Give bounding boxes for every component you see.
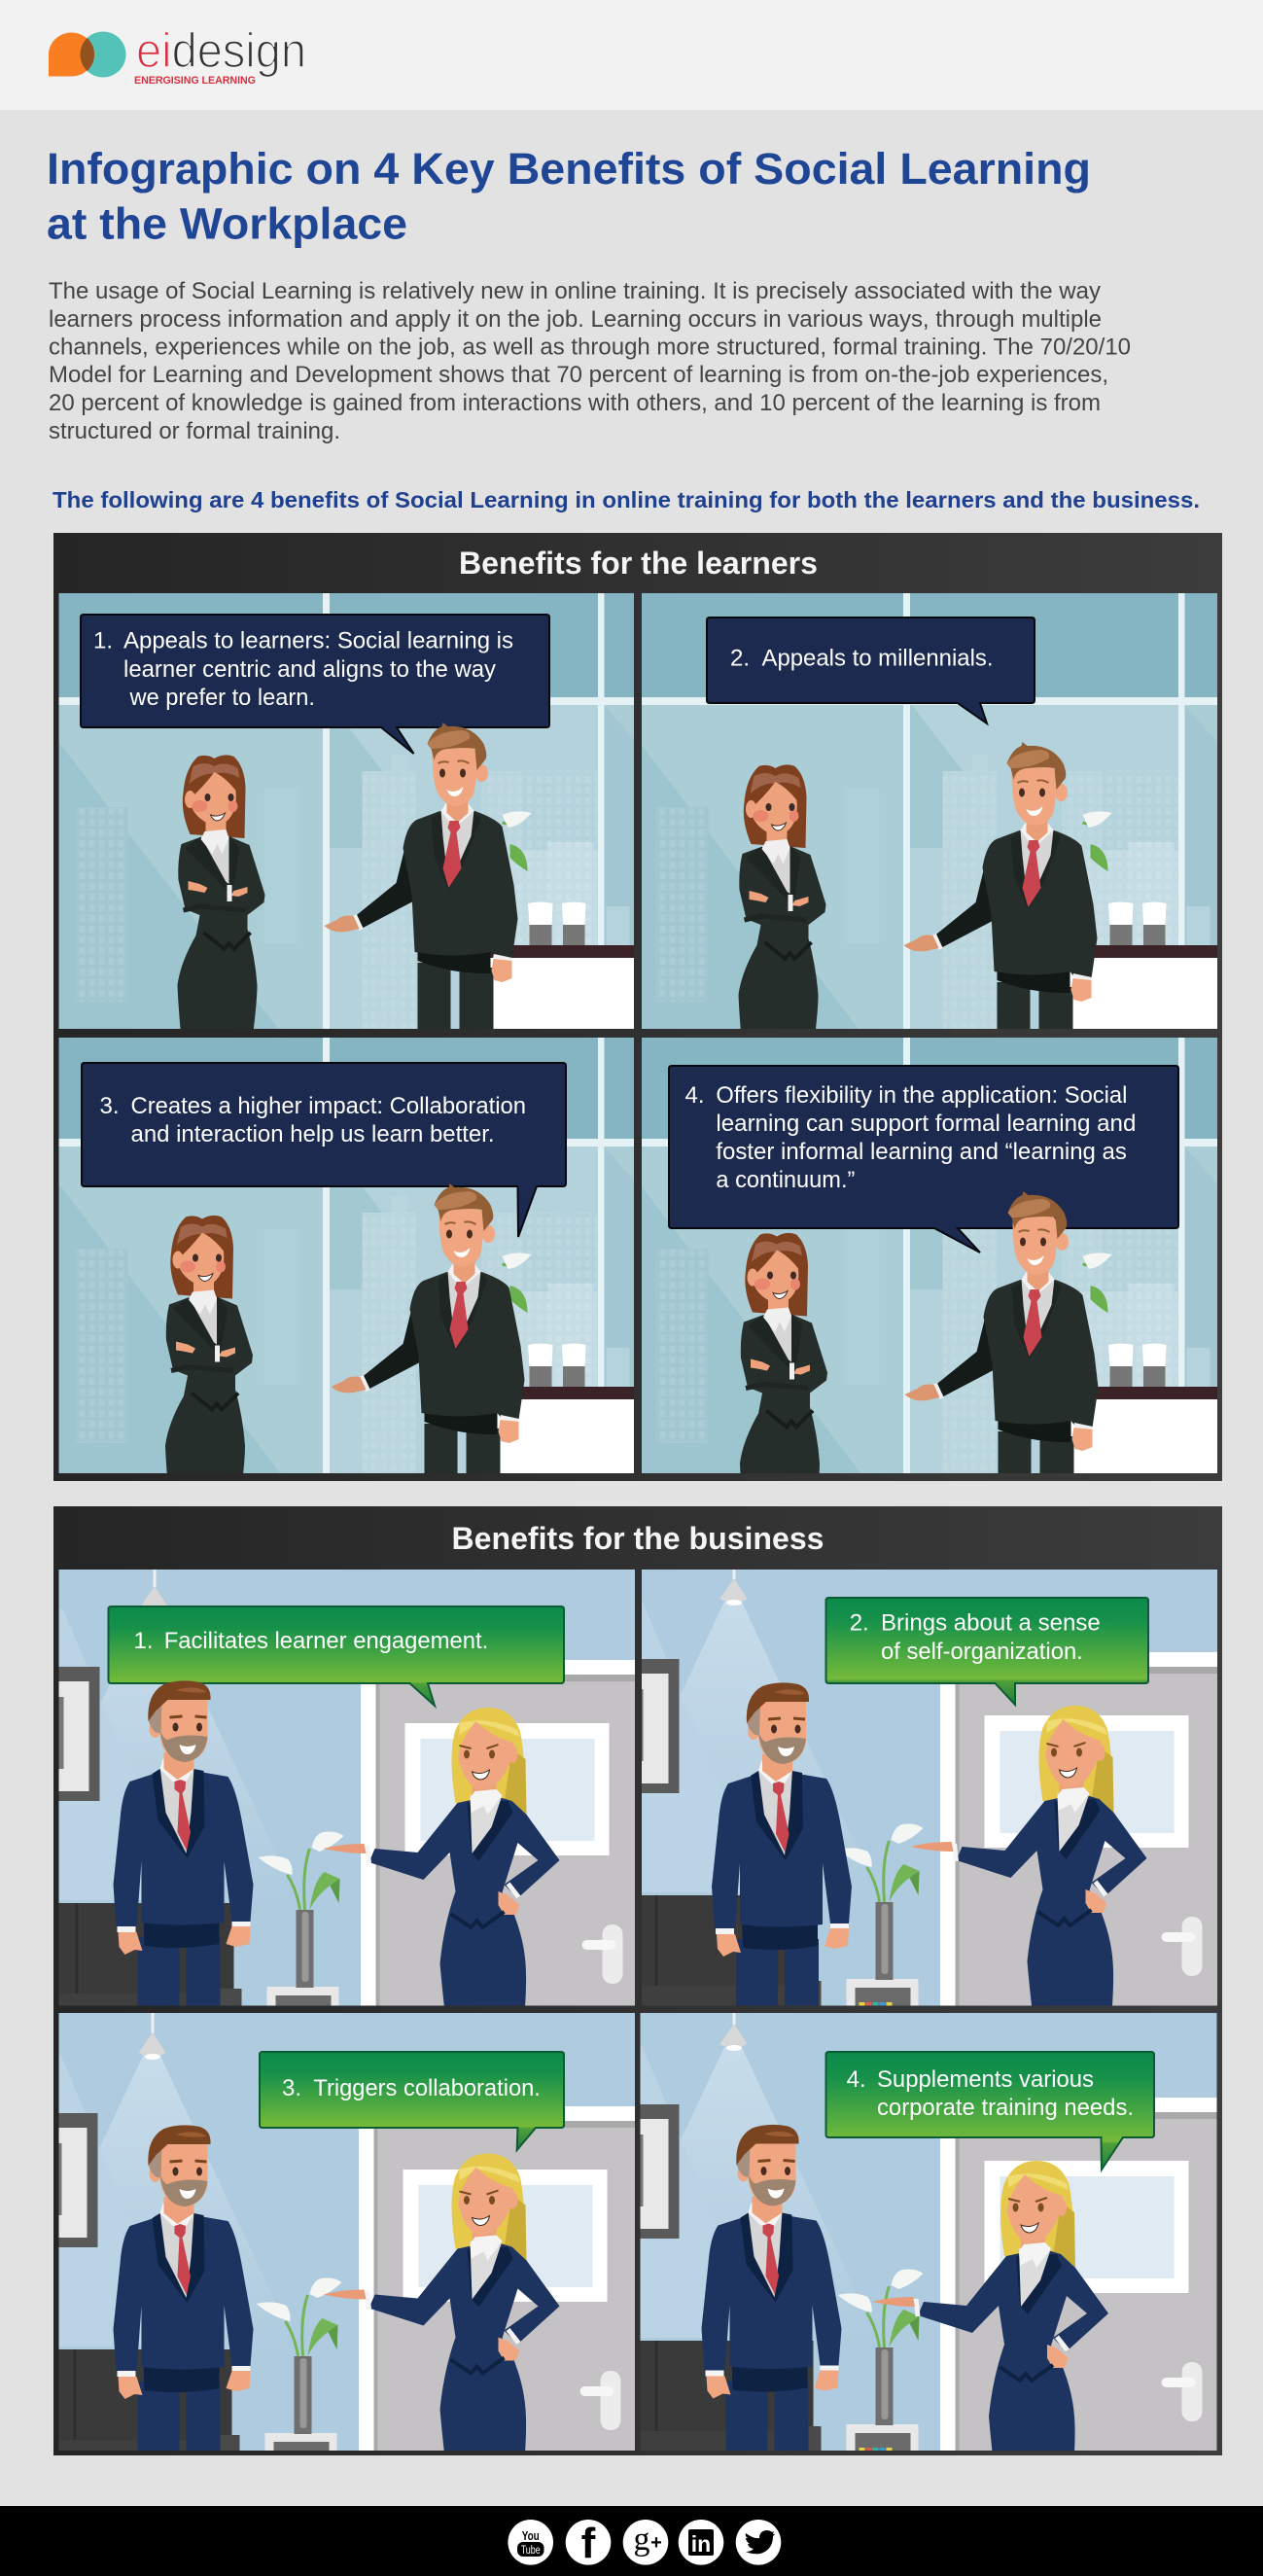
callout 4	[826, 2052, 1154, 2170]
callout 3: and interaction help us learn better.	[130, 1121, 494, 1147]
panel frame	[53, 1506, 1222, 2455]
figure: woman	[872, 2161, 1108, 2489]
heading: benefits for the business: Benefits for the business	[451, 1521, 824, 1556]
callout 2: of self-organization.	[881, 1639, 1083, 1665]
office background	[630, 1015, 1252, 1506]
figure: woman	[177, 755, 264, 1060]
title	[47, 144, 1091, 249]
icon: YouTube: You	[522, 2528, 540, 2543]
callout 2	[707, 618, 1035, 723]
callout 4: foster informal learning and “learning as	[716, 1139, 1127, 1165]
callout 2: 2.	[850, 1610, 869, 1637]
scene: learner benefit 2	[642, 593, 1217, 1029]
callout 2: 2.	[730, 646, 750, 672]
figure: woman	[323, 1708, 560, 2036]
intro paragraph	[49, 278, 1131, 444]
callout 1: we prefer to learn.	[129, 685, 315, 711]
heading: benefits for the learners: Benefits for the learners	[459, 546, 818, 581]
icon: logo overlapping shapes	[49, 31, 126, 78]
callout 2: Appeals to millennials.	[762, 646, 994, 672]
icon: YouTube: Tube	[521, 2545, 541, 2557]
scene: business benefit 1	[58, 1570, 635, 2005]
figure: man	[331, 1183, 525, 1521]
callout 3: 3.	[282, 2075, 301, 2101]
callout 2	[826, 1598, 1148, 1705]
title: Infographic on 4 Key Benefits of Social Learning	[47, 144, 1091, 194]
scene: learner benefit 1	[58, 593, 634, 1029]
footer band with social icons	[0, 2506, 1263, 2576]
callout 1	[109, 1606, 564, 1706]
figure: woman	[739, 764, 826, 1070]
office background	[628, 1533, 1250, 2044]
intro paragraph: learners process information and apply it on the job. Learning occurs in various ways, through multiple	[49, 306, 1102, 333]
figure: man	[702, 2125, 842, 2480]
figure: man	[712, 1682, 852, 2038]
icon: LinkedIn: in	[691, 2531, 711, 2557]
callout 1: Facilitates learner engagement.	[164, 1628, 488, 1654]
icon: Google Plus: +	[650, 2532, 662, 2554]
callout 3	[82, 1063, 566, 1237]
callout 4: 4.	[847, 2066, 866, 2093]
callout 4: a continuum.”	[716, 1167, 855, 1193]
panel: benefits for the business	[47, 1506, 1250, 2498]
logo: eidesign	[49, 23, 306, 87]
figure: man	[113, 1680, 253, 2036]
scene: business benefit 4	[640, 2013, 1217, 2451]
intro paragraph: channels, experiences while on the job, as well as through more structured, formal training. The 70/20/10	[49, 335, 1131, 360]
callout 3: 3.	[99, 1093, 120, 1119]
figure: man	[904, 1191, 1099, 1529]
panel frame	[53, 533, 1222, 1481]
scene: business benefit 3	[58, 2013, 635, 2451]
logo wordmark: eidesign	[136, 23, 306, 78]
callout 4	[669, 1066, 1178, 1253]
icon: Facebook: f	[581, 2520, 596, 2567]
icon: Facebook	[566, 2520, 611, 2567]
icon: Twitter	[736, 2520, 781, 2565]
figure: woman	[740, 1233, 827, 1538]
callout 3: Creates a higher impact: Collaboration	[130, 1093, 526, 1119]
scene: business benefit 2	[642, 1570, 1217, 2005]
office background	[49, 1540, 671, 2052]
callout 4: corporate training needs.	[877, 2095, 1134, 2121]
callout 2: Brings about a sense	[881, 1610, 1101, 1637]
scene: learner benefit 4	[642, 1038, 1217, 1473]
intro paragraph: structured or formal training.	[49, 418, 340, 444]
subheading: The following are 4 benefits of Social Learning in online training for both the learners and the business.	[53, 487, 1200, 512]
callout 1: 1.	[134, 1628, 154, 1654]
figure: man	[904, 742, 1097, 1079]
icon: Google Plus	[623, 2520, 668, 2565]
figure: man	[113, 2125, 253, 2481]
office background	[47, 1987, 669, 2498]
callout 3: Triggers collaboration.	[313, 2075, 541, 2101]
icon: Google Plus: g	[634, 2522, 649, 2558]
logo tagline: ENERGISING LEARNING	[134, 75, 256, 87]
figure: woman	[910, 1706, 1147, 2034]
figure: woman	[323, 2153, 560, 2482]
title: at the Workplace	[47, 198, 407, 249]
icon: LinkedIn	[679, 2520, 723, 2565]
callout 1	[81, 615, 549, 754]
office background	[49, 574, 671, 1065]
office background	[630, 574, 1252, 1065]
icon: YouTube	[508, 2520, 553, 2565]
figure: man	[325, 723, 517, 1060]
callout 4: learning can support formal learning and	[716, 1111, 1136, 1137]
panel: benefits for the learners	[49, 533, 1252, 1538]
callout 4: Supplements various	[877, 2066, 1094, 2093]
callout 1: learner centric and aligns to the way	[123, 656, 496, 683]
callout 3	[260, 2052, 564, 2150]
header band	[0, 0, 1263, 110]
scene: learner benefit 3	[58, 1038, 634, 1473]
office background	[628, 1978, 1250, 2489]
callout 1: Appeals to learners: Social learning is	[123, 628, 513, 654]
callout 1: 1.	[93, 628, 113, 654]
callout 4: 4.	[684, 1082, 705, 1109]
office background	[49, 1015, 671, 1506]
intro paragraph: Model for Learning and Development shows that 70 percent of learning is from on-the-job experiences,	[49, 362, 1108, 388]
intro paragraph: The usage of Social Learning is relatively new in online training. It is precisely associated with the way	[49, 278, 1101, 304]
intro paragraph: 20 percent of knowledge is gained from interactions with others, and 10 percent of the learning is from	[49, 390, 1101, 416]
figure: woman	[165, 1216, 253, 1521]
callout 4: Offers flexibility in the application: Social	[716, 1082, 1127, 1109]
